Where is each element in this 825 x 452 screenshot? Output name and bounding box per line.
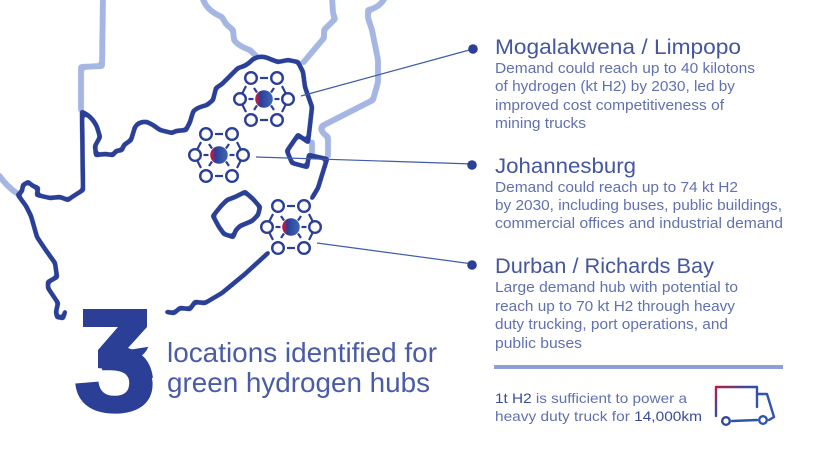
text block: Durban / Richards Bay: Large demand hub with potential to <box>495 280 738 296</box>
text block: Mogalakwena / Limpopo: Mogalakwena / Limpopo <box>495 36 741 59</box>
leader line: Durban <box>317 243 473 264</box>
truck fact: heavy duty truck for 14,000km <box>495 408 702 424</box>
marker dot: Mogalakwena <box>468 44 478 54</box>
text block: Johannesburg: Demand could reach up to 74 kt H2 <box>495 180 738 196</box>
text block: Durban / Richards Bay: reach up to 70 kt H2 through heavy <box>495 299 736 315</box>
text block: Mogalakwena / Limpopo <box>495 36 755 132</box>
hub icon: Durban <box>261 200 321 254</box>
marker dot: Durban <box>467 260 477 270</box>
headline <box>167 337 437 398</box>
text block: Johannesburg: by 2030, including buses, public buildings, <box>495 198 782 214</box>
text block: Johannesburg: Johannesburg <box>495 155 636 178</box>
divider rule <box>494 365 783 369</box>
text block: Johannesburg: commercial offices and industrial demand <box>495 216 783 232</box>
text block: Mogalakwena / Limpopo: of hydrogen (kt H2) by 2030, led by <box>495 79 736 95</box>
headline: locations identified for <box>167 337 437 368</box>
map: neighbouring country borders <box>0 0 386 194</box>
icon: truck <box>716 387 774 425</box>
text block: Mogalakwena / Limpopo: improved cost competitiveness of <box>495 98 725 114</box>
headline: green hydrogen hubs <box>167 367 430 398</box>
text block: Mogalakwena / Limpopo: mining trucks <box>495 116 586 132</box>
text block: Johannesburg <box>495 155 783 232</box>
text block: Mogalakwena / Limpopo: Demand could reach up to 40 kilotons <box>495 61 755 77</box>
truck fact: 1t H2 is sufficient to power a <box>495 390 687 406</box>
leader line: Mogalakwena <box>301 49 473 96</box>
hub icon: Johannesburg <box>189 128 249 182</box>
marker dot: Johannesburg <box>467 160 477 170</box>
text block: Durban / Richards Bay <box>495 255 738 352</box>
text block: Durban / Richards Bay: public buses <box>495 336 582 352</box>
leader line: Johannesburg <box>256 157 473 164</box>
map: South Africa outline <box>18 57 327 318</box>
truck fact <box>495 390 702 424</box>
text block: Durban / Richards Bay: Durban / Richards Bay <box>495 255 715 278</box>
text block: Durban / Richards Bay: duty trucking, port operations, and <box>495 317 728 333</box>
big number 3: 3 <box>73 283 157 442</box>
hub icon: Mogalakwena <box>234 72 294 126</box>
map: Lesotho outline <box>213 192 260 237</box>
